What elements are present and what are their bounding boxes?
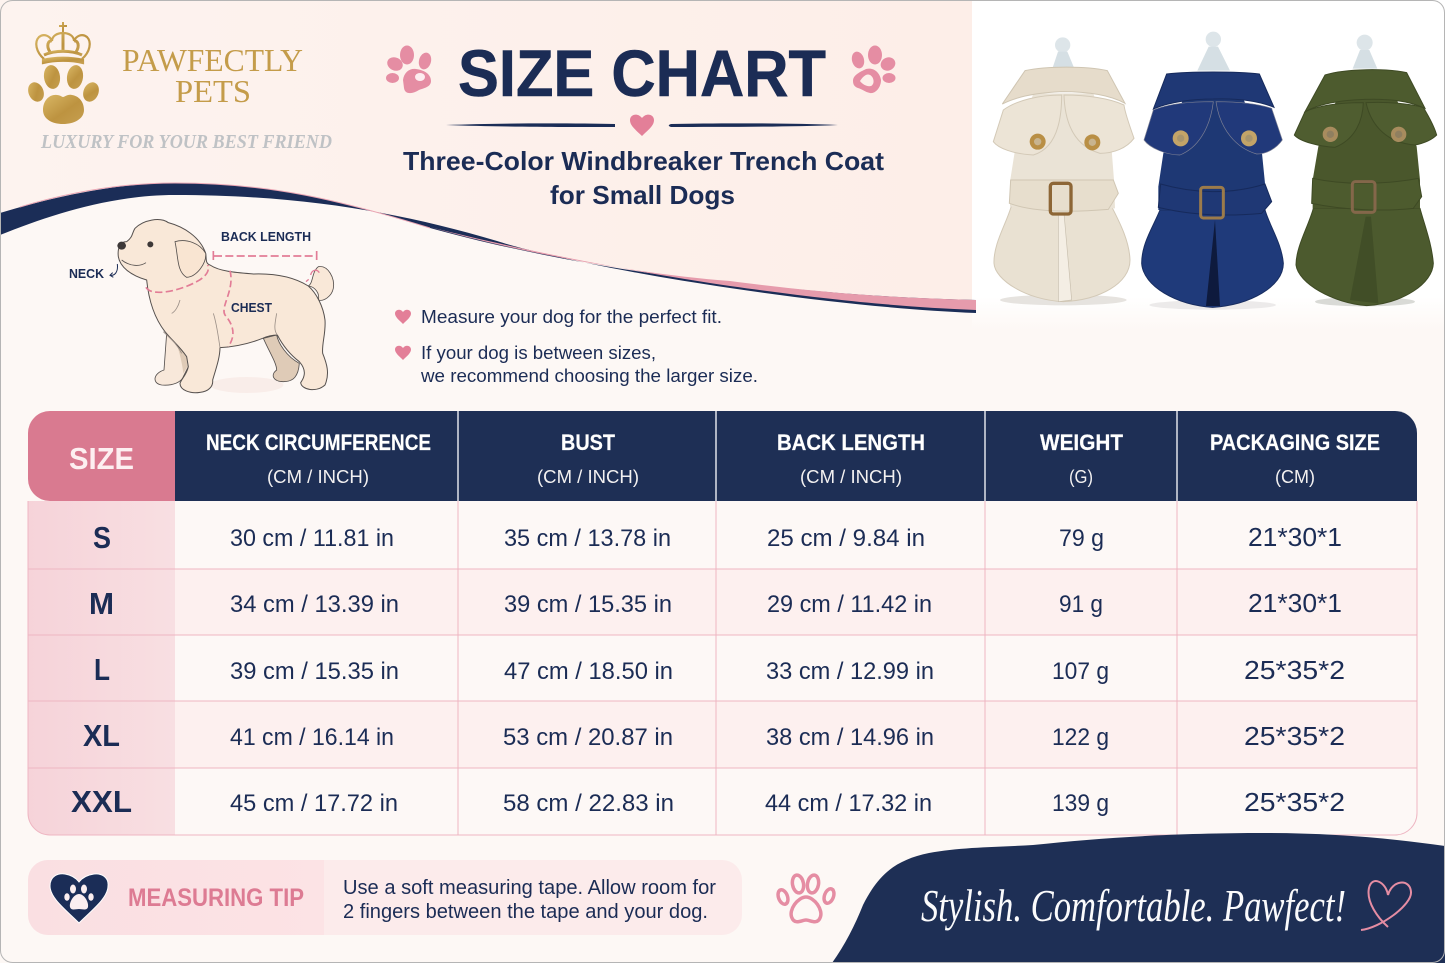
brand name: PAWFECTLY <box>122 42 303 78</box>
tape lines <box>146 251 319 347</box>
brand logo <box>25 22 332 153</box>
tail <box>308 267 334 300</box>
header: back length: (CM / INCH) <box>800 467 902 487</box>
header: bust: (CM / INCH) <box>537 467 639 487</box>
tip text <box>343 877 716 923</box>
icon: left pink paw <box>385 46 433 93</box>
dog measuring illustration <box>69 220 334 393</box>
note two: we recommend choosing the larger size. <box>420 366 758 386</box>
icon: heart with paw <box>50 874 108 923</box>
row M: 34 cm / 13.39 in <box>230 591 399 618</box>
header: neck: NECK CIRCUMFERENCE <box>206 430 431 455</box>
label: back length: BACK LENGTH <box>221 229 311 244</box>
header: weight: WEIGHT <box>1040 430 1124 455</box>
row XL: XL <box>83 718 120 753</box>
row L: 47 cm / 18.50 in <box>504 658 673 685</box>
row L: L <box>94 652 110 687</box>
row L: 33 cm / 12.99 in <box>766 658 934 685</box>
row S: 35 cm / 13.78 in <box>504 525 671 552</box>
coat: cream <box>993 37 1134 305</box>
header: packaging size: PACKAGING SIZE <box>1210 430 1380 455</box>
header: back length: BACK LENGTH <box>777 430 925 455</box>
coat: olive <box>1294 35 1437 306</box>
subtitle: for Small Dogs <box>550 180 735 210</box>
far legs <box>263 335 299 382</box>
row S: S <box>93 520 111 555</box>
ground shadow <box>210 377 283 393</box>
subtitle: Three-Color Windbreaker Trench Coat <box>403 146 884 176</box>
row XL: 122 g <box>1052 724 1109 751</box>
header: weight <box>1040 430 1124 487</box>
row XL <box>83 718 1345 753</box>
tagline: LUXURY FOR YOUR BEST FRIEND <box>40 131 332 153</box>
row XL: 38 cm / 14.96 in <box>766 724 934 751</box>
header: bust: BUST <box>561 430 616 455</box>
icon: gold paw <box>25 64 102 124</box>
product photo panel background <box>972 0 1445 330</box>
row XXL: 25*35*2 <box>1244 787 1345 817</box>
row XXL: 45 cm / 17.72 in <box>230 790 398 817</box>
icon: gold crown <box>36 22 90 63</box>
subtitle <box>403 146 884 210</box>
row S: 79 g <box>1059 525 1104 552</box>
row L: 25*35*2 <box>1244 655 1345 685</box>
row XXL <box>71 784 1345 819</box>
neck pointer <box>110 264 118 277</box>
header peach panel <box>0 0 972 300</box>
footer banner <box>832 833 1445 963</box>
row M: 29 cm / 11.42 in <box>767 591 932 618</box>
row L: 39 cm / 15.35 in <box>230 658 399 685</box>
row M: M <box>89 586 114 621</box>
row S <box>93 520 1342 555</box>
tip text: Use a soft measuring tape. Allow room for <box>343 877 716 899</box>
measuring notes <box>395 307 758 386</box>
fur lines <box>163 300 277 353</box>
header: bust <box>537 430 639 487</box>
row S: 30 cm / 11.81 in <box>230 525 394 552</box>
header: size: SIZE <box>69 441 134 476</box>
table header row <box>28 411 1417 501</box>
header: packaging size <box>1210 430 1380 487</box>
row XL: 53 cm / 20.87 in <box>503 724 673 751</box>
measuring tip bar <box>28 860 742 935</box>
ear <box>175 241 206 277</box>
label: neck: NECK <box>69 266 105 281</box>
coat: navy <box>1142 32 1283 310</box>
tip label: MEASURING TIP <box>128 884 304 912</box>
row S: 21*30*1 <box>1248 522 1342 552</box>
header swoosh <box>0 183 976 313</box>
header: weight: (G) <box>1069 467 1093 487</box>
row XXL: XXL <box>71 784 132 819</box>
product photos: three coats <box>993 32 1437 310</box>
header: neck <box>206 430 431 487</box>
body and head <box>118 220 328 393</box>
header: neck: (CM / INCH) <box>267 467 369 487</box>
row M: 21*30*1 <box>1248 588 1342 618</box>
table body background <box>28 501 1417 835</box>
row L: 107 g <box>1052 658 1109 685</box>
size table <box>28 411 1417 835</box>
row S: 25 cm / 9.84 in <box>767 525 925 552</box>
header: back length <box>777 430 925 487</box>
icon: bullet heart <box>395 346 411 360</box>
icon: outline paw <box>776 874 836 922</box>
row M: 39 cm / 15.35 in <box>504 591 672 618</box>
note two: If your dog is between sizes, <box>421 343 656 363</box>
row XL: 25*35*2 <box>1244 721 1345 751</box>
note one: Measure your dog for the perfect fit. <box>421 307 722 327</box>
row XXL: 139 g <box>1052 790 1109 817</box>
label: chest: CHEST <box>231 300 272 315</box>
title divider with heart <box>446 115 838 136</box>
title: SIZE CHART <box>458 36 826 110</box>
row XXL: 58 cm / 22.83 in <box>503 790 674 817</box>
row M: 91 g <box>1059 591 1103 618</box>
note two <box>420 343 758 386</box>
header: packaging size: (CM) <box>1275 467 1315 487</box>
tip text: 2 fingers between the tape and your dog. <box>343 901 708 923</box>
face <box>147 241 153 247</box>
icon: bullet heart <box>395 310 411 324</box>
icon: right pink paw <box>850 46 898 93</box>
row XL: 41 cm / 16.14 in <box>230 724 394 751</box>
row XXL: 44 cm / 17.32 in <box>765 790 932 817</box>
row L <box>94 652 1345 687</box>
row M <box>89 586 1342 621</box>
brand logo: PETS <box>175 73 251 109</box>
icon: heart outline <box>1361 881 1411 930</box>
